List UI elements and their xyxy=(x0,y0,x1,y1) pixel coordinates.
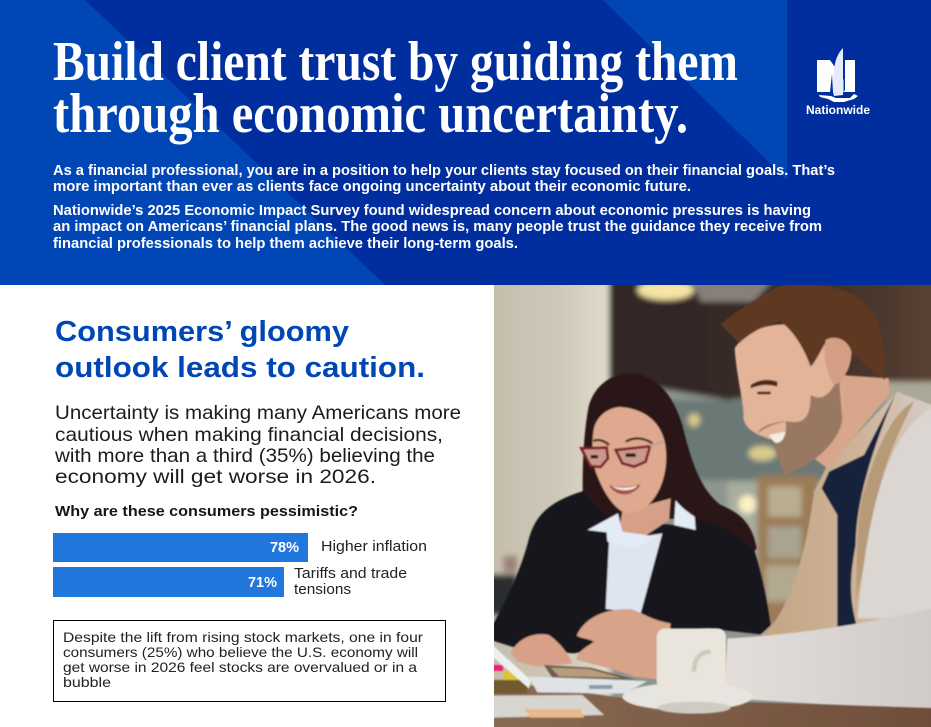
intro paragraph one xyxy=(53,163,835,195)
callout: consumers (25%) who believe the U.S. economy will xyxy=(63,644,418,660)
coffee cup xyxy=(622,683,752,711)
bar: tariffs and trade tensions xyxy=(53,566,407,598)
bar: higher inflation xyxy=(53,533,427,562)
title xyxy=(53,31,738,145)
lead paragraph: with more than a third (35%) believing the xyxy=(54,445,435,467)
title: Build client trust by guiding them xyxy=(53,31,738,93)
table xyxy=(491,680,931,727)
woman hand xyxy=(511,634,572,667)
intro paragraph two: Nationwide’s 2025 Economic Impact Survey found widespread concern about economic pressures is having xyxy=(53,203,811,219)
logo: Nationwide xyxy=(806,48,870,117)
bar: higher inflation: Higher inflation xyxy=(321,539,427,555)
intro paragraph one: more important than ever as clients face ongoing uncertainty about their economic future. xyxy=(53,179,691,195)
bar: higher inflation: 78% xyxy=(270,540,299,556)
intro paragraph two: an impact on Americans’ financial plans. The good news is, many people trust the guidance they receive from xyxy=(53,219,822,235)
intro paragraph two xyxy=(53,203,822,252)
man hand xyxy=(577,609,671,680)
bar: tariffs and trade tensions: tensions xyxy=(294,582,351,598)
lead paragraph xyxy=(54,402,461,488)
laptop xyxy=(544,665,637,680)
lead paragraph: Uncertainty is making many Americans more xyxy=(55,402,461,424)
photo: two colleagues at a laptop xyxy=(484,275,931,727)
callout: Despite the lift from rising stock markets, one in four xyxy=(63,629,423,645)
bar chart xyxy=(53,533,427,598)
section heading: outlook leads to caution. xyxy=(55,352,425,384)
section heading xyxy=(55,316,425,384)
callout xyxy=(54,620,446,702)
woman xyxy=(583,373,757,548)
title: through economic uncertainty. xyxy=(53,83,688,145)
man face xyxy=(735,324,842,474)
bar: tariffs and trade tensions: 71% xyxy=(248,575,277,591)
lead paragraph: economy will get worse in 2026. xyxy=(55,466,376,488)
chart heading: Why are these consumers pessimistic? xyxy=(55,503,358,520)
man jacket and shirt xyxy=(761,392,931,715)
intro paragraph one: As a financial professional, you are in a position to help your clients stay focused on their financial goals. That’s xyxy=(53,163,835,179)
lead paragraph: cautious when making financial decisions, xyxy=(55,424,443,446)
panel: blue header xyxy=(0,0,931,285)
logo: Nationwide: Nationwide xyxy=(806,105,870,117)
section heading: Consumers’ gloomy xyxy=(55,316,349,348)
bar: tariffs and trade tensions: Tariffs and trade xyxy=(294,566,407,582)
papers xyxy=(491,695,604,718)
callout: bubble xyxy=(63,674,111,690)
intro paragraph two: financial professionals to help them achieve their long-term goals. xyxy=(53,236,518,252)
callout: get worse in 2026 feel stocks are overvalued or in a xyxy=(63,659,417,675)
